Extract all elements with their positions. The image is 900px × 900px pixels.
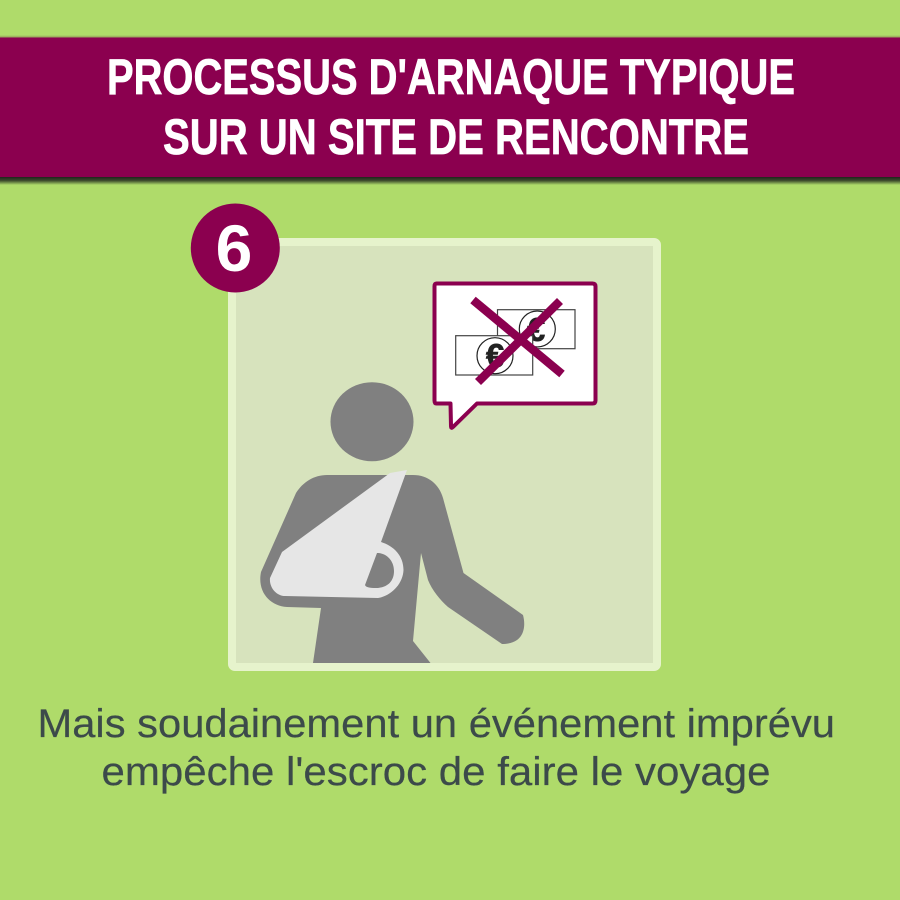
caption text: Mais soudainement un événement imprévu bbox=[38, 702, 835, 746]
speech bubble bbox=[434, 284, 596, 428]
title banner bbox=[0, 35, 900, 185]
step number badge: 6 bbox=[216, 211, 252, 285]
caption text bbox=[38, 702, 835, 794]
step number badge bbox=[191, 204, 280, 292]
icon: person head bbox=[330, 382, 414, 461]
icon: cross bbox=[473, 300, 562, 382]
caption text: empêche l'escroc de faire le voyage bbox=[102, 750, 770, 794]
icon: arm sling bbox=[270, 470, 407, 598]
panel: illustration bbox=[232, 242, 657, 667]
title bbox=[107, 49, 795, 165]
icon: euro banknote front: € bbox=[486, 337, 504, 374]
icon: euro banknote back bbox=[498, 310, 575, 349]
icon: person body bbox=[260, 475, 524, 663]
title: SUR UN SITE DE RENCONTRE bbox=[163, 109, 749, 165]
icon: euro banknote front bbox=[456, 336, 533, 375]
icon: euro banknote back: € bbox=[527, 311, 545, 348]
